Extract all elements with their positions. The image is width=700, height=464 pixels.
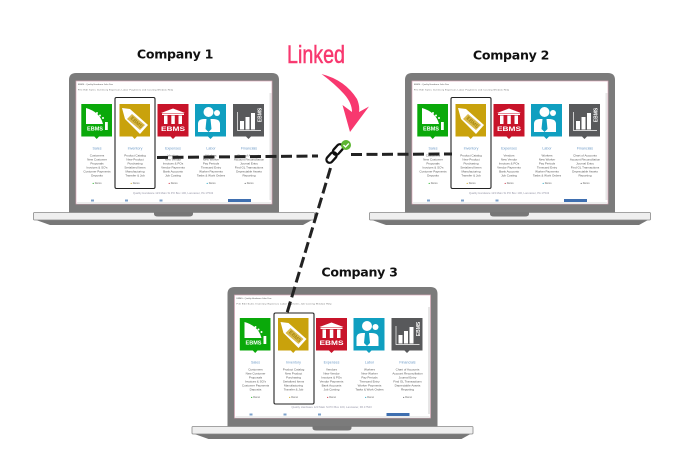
menu text: Deposits <box>427 174 439 178</box>
menu text <box>242 360 423 416</box>
menu text: Invoices & POs <box>321 376 342 380</box>
menu text: Customers <box>90 154 105 158</box>
menu text: Purchasing <box>127 162 143 166</box>
menu text: Pay Periods <box>361 376 378 380</box>
menu text: New Worker <box>361 372 378 376</box>
menu text: Customer Payments <box>242 384 270 388</box>
menu text: Workers <box>205 154 217 158</box>
menu text <box>83 146 265 202</box>
menu text: ● Demo <box>130 181 140 185</box>
menu text: Account Reconciliation <box>392 372 423 376</box>
menu text: Reporting <box>242 174 256 178</box>
menu text: Vendors <box>167 154 179 158</box>
menu text: ● Demo <box>244 181 254 185</box>
menu text: Depreciable Assets <box>572 170 598 174</box>
menu text: Manufacturing <box>461 170 481 174</box>
laptop: Company 2 <box>370 73 650 225</box>
menu text: Find GL Transactions <box>571 166 600 170</box>
app window: EBMS - Quality Hardware John Doe <box>414 83 450 86</box>
menu text: Purchasing <box>286 376 301 380</box>
menu text: ● Demo <box>206 181 216 185</box>
menu text: Job Costing <box>165 174 181 178</box>
menu text: Worker Payments <box>199 170 223 174</box>
icon: Sales: EBMS <box>246 340 262 346</box>
menu text: Find GL Transactions <box>235 166 264 170</box>
icon: Expenses: EBMS <box>161 126 186 133</box>
icon: Financials <box>392 318 422 353</box>
icon: Expenses: EBMS <box>320 340 344 347</box>
laptop lid <box>69 73 279 213</box>
app window: File Edit Sales Inventory Expenses Labor Payments Job Costing Window Help <box>414 88 510 92</box>
menu text: Find GL Transactions <box>393 380 422 384</box>
menu text: New Product <box>126 158 144 162</box>
menu text: ● Demo <box>168 181 178 185</box>
heading: Company 2: Company 2 <box>473 48 549 62</box>
menu text: New Vendor <box>501 158 517 162</box>
menu text: Deposits <box>250 388 262 392</box>
icon: Financials: EBMS <box>416 321 422 336</box>
menu text: Product Catalog <box>283 368 305 372</box>
icon: Expenses <box>158 104 188 139</box>
menu text: Quality Hardware 123 Main St PO Box 100, Lancaster, PA 17543 <box>291 405 372 409</box>
menu text: Vendor Payments <box>161 166 185 170</box>
icon: Sales <box>81 104 112 139</box>
menu text: Quality Hardware 123 Main St PO Box 100, Lancaster, PA 17543 <box>469 191 550 195</box>
menu text: Financials <box>399 360 416 364</box>
menu text: Workers <box>541 154 553 158</box>
menu text: Product Catalog <box>124 154 146 158</box>
menu text: Bank Accounts <box>499 170 519 174</box>
menu text: Chart of Accounts <box>573 154 597 158</box>
menu text: Reporting <box>578 174 592 178</box>
menu text: Labor <box>365 360 375 364</box>
menu text: Financials <box>577 146 593 150</box>
menu text: Tasks & Work Orders <box>533 174 562 178</box>
menu text: Depreciable Assets <box>236 170 262 174</box>
app window: EBMS - Quality Hardware John Doe <box>78 83 114 86</box>
menu text: Quality Hardware 123 Main St PO Box 100, Lancaster, PA 17543 <box>133 191 214 195</box>
icon: Financials: EBMS <box>594 107 600 122</box>
menu text: Journal Entry <box>576 162 594 166</box>
icon: Inventory: EBMS <box>287 330 303 344</box>
menu text: New Vendor <box>165 158 181 162</box>
menu text: Serialized Items <box>124 166 146 170</box>
menu text: Job Costing <box>324 388 340 392</box>
menu text: ● Demo <box>580 181 590 185</box>
app window <box>412 81 608 204</box>
arrow: Linked to chain <box>322 74 369 132</box>
menu text: ● Demo <box>542 181 552 185</box>
menu text: Manufacturing <box>125 170 145 174</box>
menu text: ● Demo <box>504 181 514 185</box>
laptop base <box>370 212 650 225</box>
menu text: Pay Periods <box>539 162 556 166</box>
laptop: Company 1 <box>34 73 314 225</box>
menu text: Invoices & SO's <box>245 380 267 384</box>
app window: File Edit Sales Inventory Expenses Labor Payments Job Costing Window Help <box>236 302 332 306</box>
menu text: Product Catalog <box>460 154 482 158</box>
app window: File Edit Sales Inventory Expenses Labor Payments Job Costing Window Help <box>78 88 174 92</box>
menu text: Vendors <box>326 368 338 372</box>
menu text: ● Demo <box>428 181 438 185</box>
menu text: Inventory <box>286 360 301 364</box>
menu text: Vendor Payments <box>497 166 521 170</box>
highlight box: Inventory <box>274 313 314 404</box>
menu text: Depreciable Assets <box>395 384 421 388</box>
menu text: Proposals <box>249 376 263 380</box>
menu text: Expenses <box>165 146 181 150</box>
menu text: Invoices & SO's <box>86 166 108 170</box>
menu text: Worker Payments <box>358 384 382 388</box>
menu text: Inventory <box>464 146 479 150</box>
menu text: ● Demo <box>466 181 476 185</box>
icon: Expenses <box>494 104 524 139</box>
menu text: Transfer & Job <box>461 174 481 178</box>
icon: Sales: EBMS <box>423 126 440 132</box>
menu text: Tasks & Work Orders <box>355 388 384 392</box>
icon: Financials <box>233 104 264 139</box>
icon: Financials <box>569 104 600 139</box>
menu text: Chart of Accounts <box>396 368 420 372</box>
icon: Inventory: EBMS <box>465 116 480 130</box>
icon: Inventory <box>120 104 150 139</box>
icon: Inventory <box>278 318 308 353</box>
icon: Sales <box>240 318 270 353</box>
laptop: Company 3 <box>192 287 473 439</box>
menu text: Customers <box>248 368 263 372</box>
menu text: ● Demo <box>403 395 413 399</box>
menu text: Vendors <box>503 154 515 158</box>
menu text: Bank Accounts <box>322 384 342 388</box>
menu text: Workers <box>364 368 376 372</box>
dashed link: chain to Company 3 <box>287 168 330 313</box>
menu text: New Customer <box>246 372 265 376</box>
menu text: Timecard Entry <box>537 166 558 170</box>
menu text: Vendor Payments <box>320 380 344 384</box>
menu text: Expenses <box>324 360 340 364</box>
menu text: Reporting <box>401 388 414 392</box>
menu text: Invoices & SO's <box>422 166 444 170</box>
heading: Company 1: Company 1 <box>137 46 213 62</box>
menu text: Customers <box>426 154 441 158</box>
icon: Inventory <box>456 104 486 139</box>
highlight box: Inventory <box>115 98 155 188</box>
menu text: Job Costing <box>501 174 517 178</box>
menu text: Proposals <box>426 162 440 166</box>
menu text: Tasks & Work Orders <box>197 174 226 178</box>
menu text: Invoices & POs <box>499 162 520 166</box>
menu text: Pay Periods <box>203 162 220 166</box>
menu text: Account Reconciliation <box>570 158 601 162</box>
icon: Financials: EBMS <box>258 107 264 122</box>
menu text: Journal Entry <box>240 162 258 166</box>
icon: Inventory: EBMS <box>129 116 144 130</box>
highlight box: Inventory <box>451 98 491 188</box>
app window: EBMS - Quality Hardware John Doe <box>236 297 272 300</box>
app window <box>76 81 272 204</box>
icon: Sales <box>417 104 448 139</box>
laptop lid <box>405 73 615 213</box>
menu text: Chart of Accounts <box>237 154 261 158</box>
menu text: Timecard Entry <box>359 380 380 384</box>
menu text: Inventory <box>128 146 143 150</box>
menu text: New Customer <box>87 158 107 162</box>
dashed link: Company 1 to chain <box>157 156 318 158</box>
menu text: Transfer & Job <box>284 388 304 392</box>
menu text: New Customer <box>423 158 443 162</box>
menu text: Labor <box>206 146 216 150</box>
menu text: ● Demo <box>327 395 337 399</box>
menu text: Financials <box>241 146 257 150</box>
menu text: Transfer & Job <box>125 174 145 178</box>
menu text: Customer Payments <box>83 170 111 174</box>
menu text: Bank Accounts <box>163 170 183 174</box>
menu text: Purchasing <box>463 162 479 166</box>
menu text: ● Demo <box>251 395 261 399</box>
menu text: ● Demo <box>92 181 102 185</box>
heading: Company 3: Company 3 <box>321 264 398 280</box>
menu text: ● Demo <box>365 395 375 399</box>
laptop base <box>192 426 473 439</box>
menu text: New Worker <box>539 158 555 162</box>
menu text: Serialized Items <box>283 380 305 384</box>
menu text: Journal Entry <box>399 376 417 380</box>
menu text: Customer Payments <box>419 170 447 174</box>
menu text: New Product <box>285 372 302 376</box>
app window <box>234 295 430 418</box>
menu text: Deposits <box>91 174 103 178</box>
icon: Labor <box>531 104 562 139</box>
menu text: New Vendor <box>323 372 340 376</box>
laptop base <box>34 212 314 225</box>
icon: Labor <box>354 318 384 353</box>
icon: Expenses: EBMS <box>497 126 522 133</box>
menu text: Labor <box>542 146 552 150</box>
dashed link: chain to Company 2 <box>351 152 452 156</box>
menu text: New Product <box>462 158 480 162</box>
menu text: Timecard Entry <box>201 166 222 170</box>
menu text: Sales <box>92 146 102 150</box>
menu text: Invoices & POs <box>163 162 184 166</box>
menu text: Serialized Items <box>460 166 482 170</box>
icon: Labor <box>195 104 226 139</box>
icon: green check badge <box>341 140 351 150</box>
menu text: Manufacturing <box>284 384 303 388</box>
menu text <box>419 146 601 202</box>
label: Linked: Linked <box>287 41 345 69</box>
menu text: Sales <box>428 146 438 150</box>
menu text: Account Reconciliation <box>234 158 265 162</box>
icon: Sales: EBMS <box>87 126 104 132</box>
menu text: Proposals <box>90 162 104 166</box>
menu text: ● Demo <box>289 395 299 399</box>
menu text: Worker Payments <box>535 170 559 174</box>
icon: chain link <box>325 143 344 164</box>
menu text: New Worker <box>203 158 219 162</box>
menu text: Sales <box>251 360 260 364</box>
laptop lid <box>228 287 438 427</box>
menu text: Expenses <box>501 146 517 150</box>
icon: Expenses <box>316 318 347 353</box>
